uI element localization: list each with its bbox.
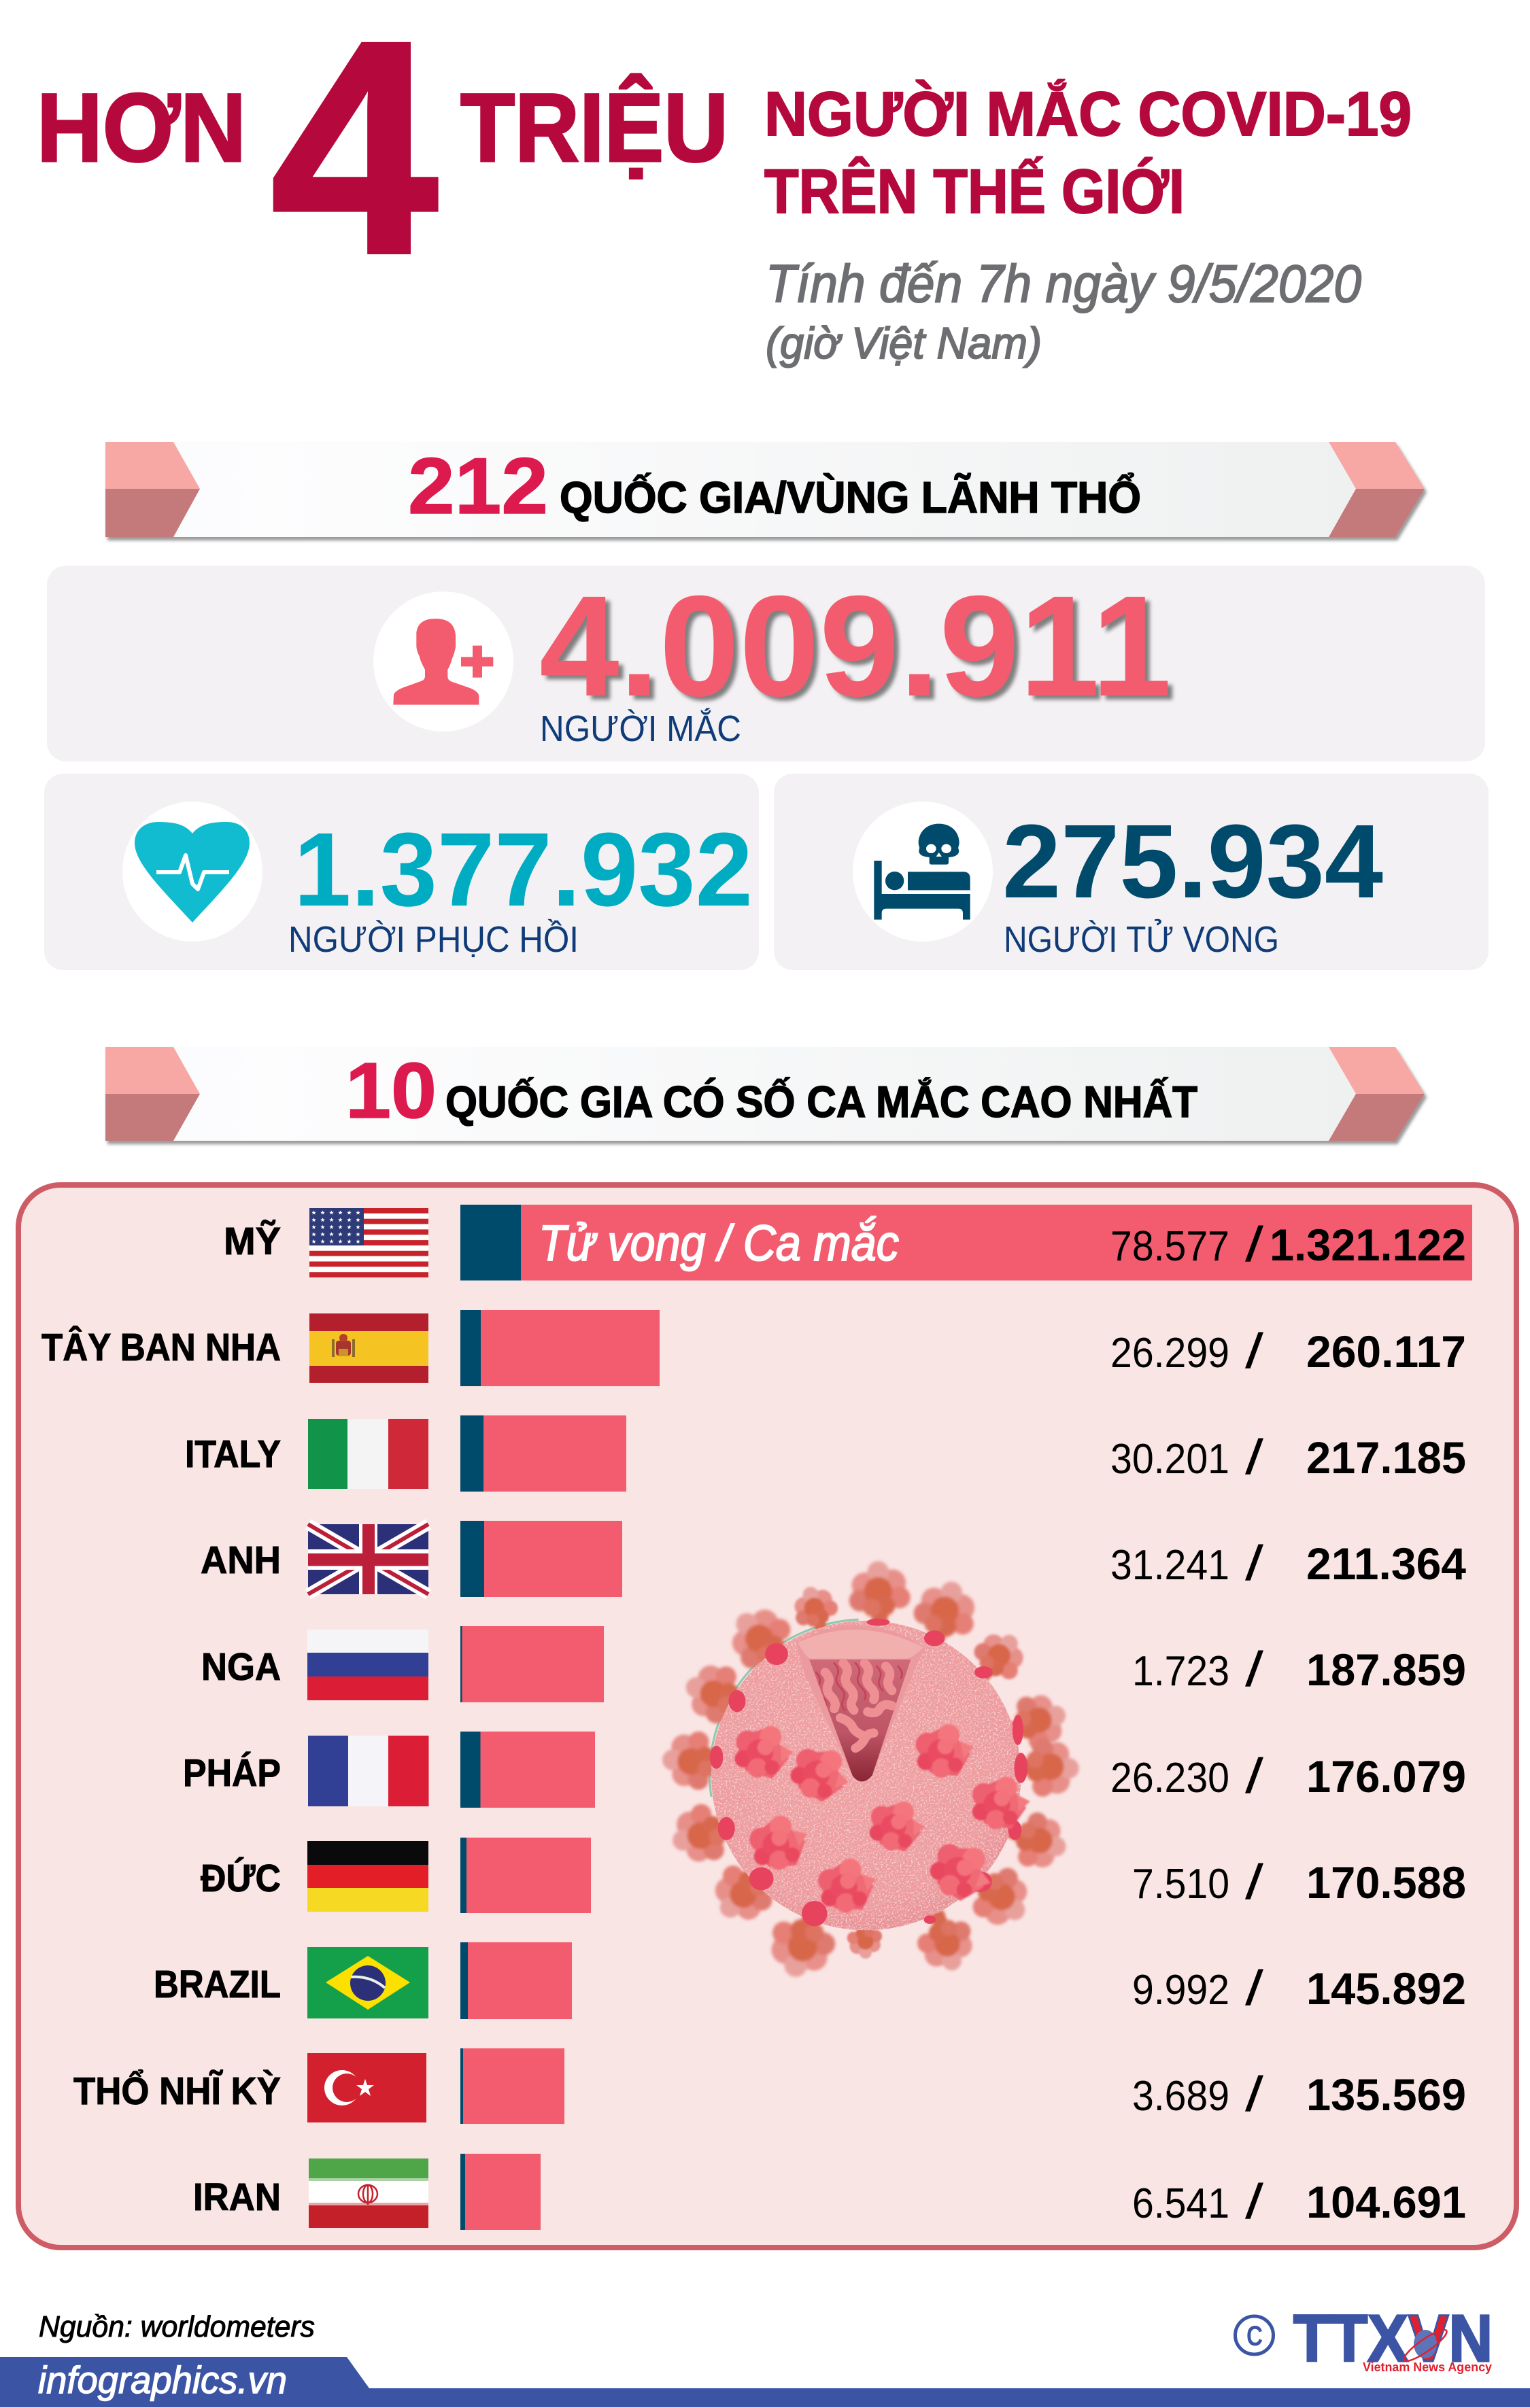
row: Tây Ban Nha: TÂY BAN NHA bbox=[41, 1325, 281, 1369]
row: Italy: 30.201 bbox=[1110, 1436, 1229, 1483]
row: Iran: IRAN bbox=[193, 2175, 281, 2219]
row: Pháp: / bbox=[1245, 1749, 1263, 1804]
legend: tử vong / ca mắc: Tử vong / Ca mắc bbox=[539, 1215, 899, 1271]
row: Nga: / bbox=[1245, 1642, 1263, 1697]
number: 4.009.911: 4.009.911 bbox=[539, 566, 1172, 726]
row: Đức: / bbox=[1245, 1855, 1263, 1910]
logo: copyright TTXVN: C bbox=[1246, 2320, 1263, 2352]
icon: bed and skull bbox=[853, 802, 993, 942]
date note bbox=[766, 254, 1361, 368]
row: Brazil bbox=[154, 1942, 1466, 2019]
icon: person plus bbox=[373, 591, 513, 732]
row: Đức bbox=[201, 1838, 1466, 1913]
row: Pháp: PHÁP bbox=[183, 1751, 281, 1795]
number: 1.377.932: 1.377.932 bbox=[294, 811, 753, 928]
label: người mắc: NGƯỜI MẮC bbox=[540, 708, 741, 749]
row: Mỹ: / bbox=[1245, 1218, 1263, 1272]
flag: Russia bbox=[307, 1630, 428, 1700]
row: Pháp bbox=[183, 1732, 1466, 1808]
virus illustration bbox=[660, 1561, 1081, 1986]
title: HƠN 4 TRIỆU: TRIỆU bbox=[460, 74, 728, 182]
banner: 212 quốc gia: QUỐC GIA/VÙNG LÃNH THỔ bbox=[560, 472, 1141, 522]
row: Nga: NGA bbox=[201, 1645, 281, 1689]
row: Tây Ban Nha bbox=[41, 1310, 1466, 1386]
logo: copyright TTXVN: TTXVN bbox=[1293, 2301, 1493, 2375]
flag: Turkey bbox=[307, 2053, 426, 2122]
row: Tây Ban Nha: 260.117 bbox=[1306, 1326, 1466, 1377]
row: Thổ Nhĩ Kỳ: / bbox=[1245, 2067, 1263, 2122]
banner: 212 quốc gia bbox=[105, 441, 1425, 537]
row: Đức: ĐỨC bbox=[201, 1857, 281, 1900]
row: Mỹ bbox=[224, 1205, 1472, 1281]
date note: (giờ Việt Nam) bbox=[766, 318, 1042, 368]
subtitle: người mắc covid-19 trên thế giới: TRÊN THẾ GIỚI bbox=[764, 156, 1185, 226]
row: Thổ Nhĩ Kỳ: 135.569 bbox=[1306, 2069, 1466, 2120]
row: Anh bbox=[201, 1521, 1466, 1597]
row: Iran bbox=[193, 2154, 1466, 2230]
row: Nga: 1.723 bbox=[1132, 1648, 1229, 1695]
row: Anh: / bbox=[1245, 1536, 1263, 1591]
row: Đức: 170.588 bbox=[1306, 1857, 1466, 1908]
source: Nguồn: worldometers bbox=[39, 2310, 315, 2343]
title: HƠN 4 TRIỆU: HƠN bbox=[37, 74, 246, 182]
footer bar bbox=[0, 2357, 1530, 2407]
subtitle: người mắc covid-19 trên thế giới bbox=[764, 79, 1412, 226]
title: HƠN 4 TRIỆU bbox=[37, 0, 728, 317]
row: Iran: / bbox=[1245, 2175, 1263, 2229]
flag: UK bbox=[308, 1524, 428, 1594]
row: Italy bbox=[185, 1415, 1466, 1492]
row: Mỹ: 78.577 bbox=[1110, 1223, 1229, 1270]
flag: Iran bbox=[309, 2158, 428, 2228]
banner: 212 quốc gia: 212 bbox=[408, 441, 548, 530]
panel: ranking bbox=[18, 1185, 1516, 2248]
flag: Germany bbox=[307, 1841, 428, 1912]
row: Pháp: 26.230 bbox=[1110, 1755, 1229, 1802]
row: Italy: / bbox=[1245, 1430, 1263, 1485]
subtitle: người mắc covid-19 trên thế giới: NGƯỜI MẮC COVID-19 bbox=[764, 79, 1412, 149]
row: Brazil: BRAZIL bbox=[154, 1963, 281, 2006]
panel: total cases bbox=[47, 566, 1485, 761]
row: Italy: ITALY bbox=[185, 1432, 281, 1476]
label: người phục hồi: NGƯỜI PHỤC HỒI bbox=[288, 919, 579, 960]
row: Tây Ban Nha: / bbox=[1245, 1324, 1263, 1379]
row: Brazil: 145.892 bbox=[1306, 1963, 1466, 2014]
row: Anh: 31.241 bbox=[1110, 1542, 1229, 1589]
row: Tây Ban Nha: 26.299 bbox=[1110, 1330, 1229, 1377]
row: Đức: 7.510 bbox=[1132, 1861, 1229, 1908]
banner: 10 quốc gia bbox=[105, 1046, 1425, 1141]
flag: Spain bbox=[309, 1313, 428, 1383]
panel: deaths bbox=[774, 774, 1489, 970]
row: Brazil: / bbox=[1245, 1961, 1263, 2016]
site name: infographics.vn bbox=[38, 2358, 287, 2401]
row: Brazil: 9.992 bbox=[1132, 1967, 1229, 2014]
row: Nga: 187.859 bbox=[1306, 1645, 1466, 1695]
number: 275.934: 275.934 bbox=[1002, 803, 1383, 920]
row: Anh: 211.364 bbox=[1306, 1538, 1466, 1589]
date note: Tính đến 7h ngày 9/5/2020 bbox=[766, 254, 1361, 313]
flag: Italy bbox=[308, 1419, 428, 1489]
row: Thổ Nhĩ Kỳ: 3.689 bbox=[1132, 2073, 1229, 2120]
flag: USA bbox=[309, 1208, 428, 1277]
row: Nga bbox=[201, 1626, 1466, 1702]
panel: recovered bbox=[44, 774, 759, 970]
icon: heart pulse bbox=[122, 802, 262, 942]
row: Thổ Nhĩ Kỳ: THỔ NHĨ KỲ bbox=[73, 2069, 281, 2113]
label: người tử vong: NGƯỜI TỬ VONG bbox=[1004, 919, 1279, 960]
flag: France bbox=[308, 1736, 428, 1806]
row: Pháp: 176.079 bbox=[1306, 1751, 1466, 1802]
row: Thổ Nhĩ Kỳ bbox=[73, 2048, 1466, 2124]
banner: 10 quốc gia: QUỐC GIA CÓ SỐ CA MẮC CAO NHẤT bbox=[445, 1077, 1197, 1126]
logo: copyright TTXVN: Vietnam News Agency bbox=[1363, 2360, 1492, 2374]
row: Italy: 217.185 bbox=[1306, 1432, 1466, 1483]
row: Iran: 6.541 bbox=[1132, 2180, 1229, 2227]
row: Anh: ANH bbox=[201, 1538, 281, 1582]
row: Iran: 104.691 bbox=[1306, 2177, 1466, 2227]
row: Mỹ: 1.321.122 bbox=[1270, 1220, 1466, 1270]
banner: 10 quốc gia: 10 bbox=[345, 1046, 437, 1135]
flag: Brazil bbox=[307, 1947, 428, 2018]
row: Mỹ: MỸ bbox=[224, 1220, 281, 1263]
